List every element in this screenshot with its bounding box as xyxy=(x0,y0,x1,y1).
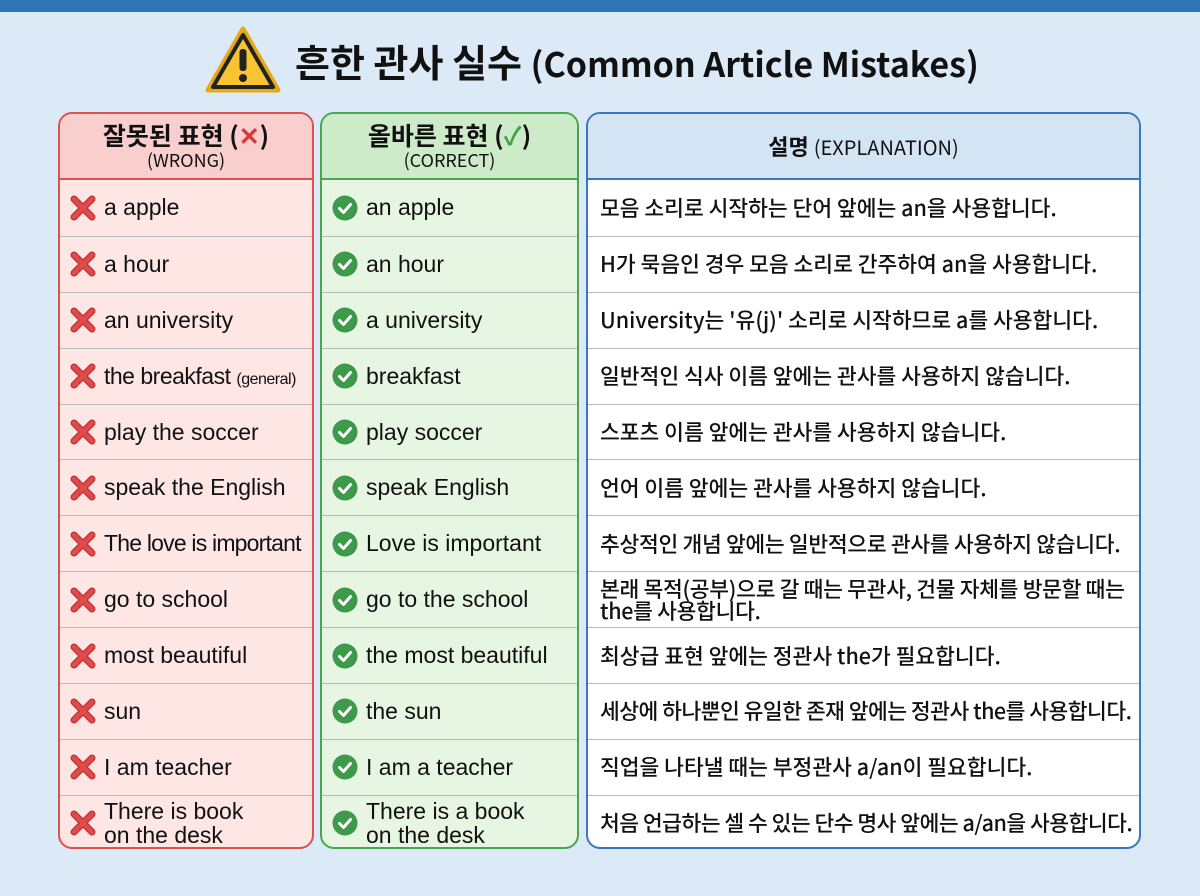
heading: explanation xyxy=(588,114,1139,180)
heading: wrong: (WRONG) xyxy=(147,147,225,173)
panel: wrong: on the desk xyxy=(104,822,223,848)
panel: wrong: The love is important xyxy=(104,530,301,556)
panel: explanation: 언어 이름 앞에는 관사를 사용하지 않습니다. xyxy=(600,472,987,503)
panel: explanation: 모음 소리로 시작하는 단어 앞에는 an을 사용합니다. xyxy=(600,192,1057,223)
panel: correct: the sun xyxy=(366,698,441,724)
panel: correct: Love is important xyxy=(366,530,541,556)
panel: wrong: sun xyxy=(104,698,141,724)
panel: wrong: an university xyxy=(104,307,233,333)
heading: wrong xyxy=(60,114,312,180)
heading: wrong: 잘못된 표현 (✕) xyxy=(103,117,269,153)
panel: explanation: H가 묵음인 경우 모음 소리로 간주하여 an을 사용합니다. xyxy=(600,248,1097,279)
panel: correct: a university xyxy=(366,307,482,333)
panel: explanation xyxy=(586,112,1141,849)
panel: wrong xyxy=(58,112,314,849)
panel: correct: There is a book xyxy=(366,798,525,824)
panel: correct: I am a teacher xyxy=(366,754,513,780)
panel: explanation: 최상급 표현 앞에는 정관사 the가 필요합니다. xyxy=(600,640,1001,671)
icon: warning xyxy=(206,26,280,92)
panel: correct: go to the school xyxy=(366,586,528,612)
panel: wrong: go to school xyxy=(104,586,228,612)
panel: wrong: a apple xyxy=(104,194,179,220)
heading: explanation: 설명 (EXPLANATION) xyxy=(768,130,959,162)
panel: wrong: a hour xyxy=(104,251,169,277)
heading: correct: (CORRECT) xyxy=(404,147,495,173)
panel: wrong: most beautiful xyxy=(104,642,247,668)
heading: correct: 올바른 표현 (✓) xyxy=(368,117,531,153)
panel: correct: an apple xyxy=(366,194,454,220)
panel: explanation: 추상적인 개념 앞에는 일반적으로 관사를 사용하지 않습니다. xyxy=(600,528,1120,559)
panel: correct: play soccer xyxy=(366,418,482,444)
panel: wrong: the breakfast (general) xyxy=(104,363,296,389)
panel: correct: speak English xyxy=(366,474,509,500)
panel: wrong: I am teacher xyxy=(104,754,232,780)
panel: explanation: the를 사용합니다. xyxy=(600,595,761,626)
panel: explanation: 스포츠 이름 앞에는 관사를 사용하지 않습니다. xyxy=(600,416,1006,447)
panel: correct xyxy=(320,112,579,849)
panel: explanation: 세상에 하나뿐인 유일한 존재 앞에는 정관사 the를 사용합니다. xyxy=(600,695,1132,726)
panel: correct: an hour xyxy=(366,251,444,277)
panel: wrong: There is book xyxy=(104,798,243,824)
panel: correct: the most beautiful xyxy=(366,642,548,668)
panel: wrong: play the soccer xyxy=(104,418,259,444)
panel: correct: on the desk xyxy=(366,822,485,848)
title: 흔한 관사 실수 (Common Article Mistakes) xyxy=(295,32,979,88)
panel: explanation: 일반적인 식사 이름 앞에는 관사를 사용하지 않습니다. xyxy=(600,360,1071,391)
panel: explanation: 처음 언급하는 셀 수 있는 단수 명사 앞에는 a/an을 사용합니다. xyxy=(600,807,1132,838)
panel: correct: breakfast xyxy=(366,363,461,389)
panel: explanation: 본래 목적(공부)으로 갈 때는 무관사, 건물 자체를 방문할 때는 xyxy=(600,573,1125,604)
panel: explanation: University는 '유(j)' 소리로 시작하므로 a를 사용합니다. xyxy=(600,304,1098,335)
heading: correct xyxy=(322,114,577,180)
panel: wrong: speak the English xyxy=(104,474,286,500)
panel: explanation: 직업을 나타낼 때는 부정관사 a/an이 필요합니다. xyxy=(600,751,1033,782)
